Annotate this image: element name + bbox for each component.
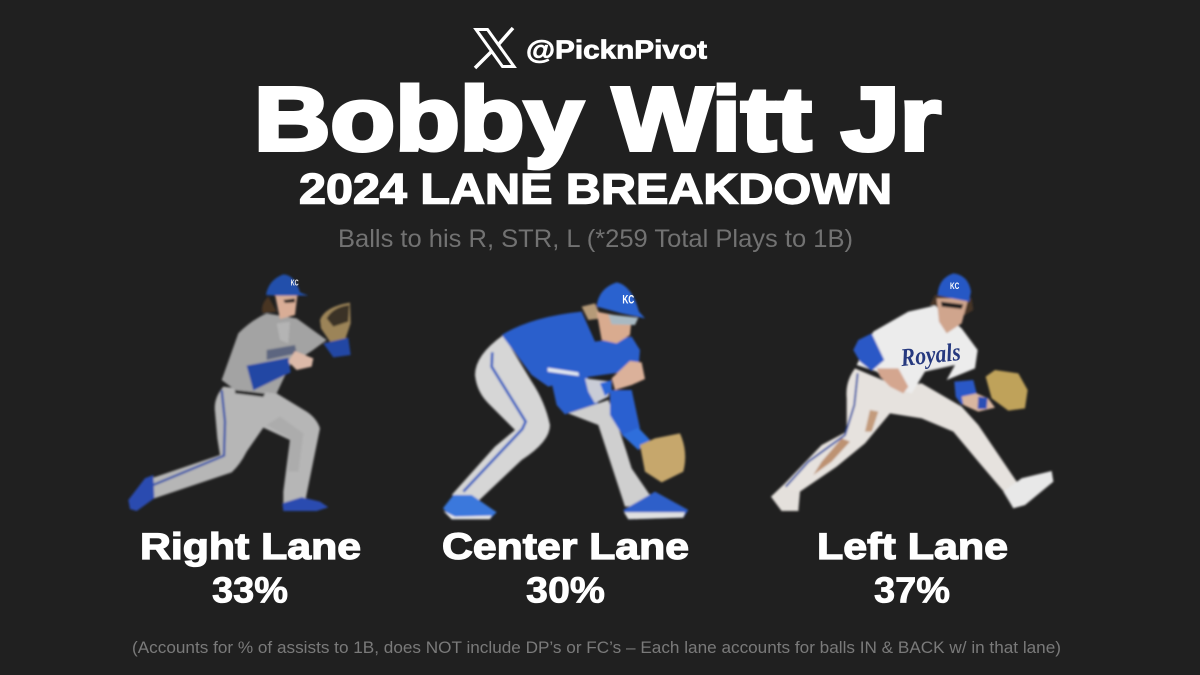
wrist (585, 378, 612, 403)
lane label: center (442, 526, 689, 610)
pant stripe (153, 390, 225, 485)
subtitle: 2024 LANE BREAKDOWN (299, 166, 892, 214)
jersey (857, 306, 978, 393)
face (937, 298, 968, 333)
lane label: right (140, 526, 361, 610)
far arm (610, 390, 640, 437)
player: center lane fielder in blue jersey (443, 282, 688, 519)
handle: @PicknPivot: @PicknPivot (526, 34, 707, 64)
lane label: left: Left Lane (817, 526, 1008, 567)
jersey (502, 312, 640, 387)
glove (320, 303, 351, 342)
title: Bobby Witt Jr (254, 70, 941, 170)
face (597, 312, 632, 343)
near leg (452, 335, 550, 501)
footnote: (Accounts for % of assists to 1B, does NOT include DP’s or FC’s – Each lane accounts for balls IN & BACK w/ in that lane) (132, 638, 1061, 657)
face (275, 294, 297, 319)
cap logo: KC (622, 292, 635, 306)
cap logo: KC (291, 278, 299, 288)
percentage: right: 33% (212, 570, 288, 610)
percentage: left: 37% (874, 570, 950, 610)
cap (938, 273, 971, 302)
sleeve near (853, 333, 884, 371)
percentage: center: 30% (526, 570, 605, 610)
hand (877, 368, 908, 393)
pant stripe (463, 352, 526, 492)
cleats (128, 475, 154, 511)
pants (771, 368, 1053, 511)
pant stripe (786, 373, 858, 487)
belt (235, 390, 265, 397)
far arm (954, 380, 977, 405)
glove (640, 433, 685, 482)
description line: Balls to his R, STR, L (*259 Total Plays to 1B) (338, 225, 853, 253)
cleats (443, 495, 497, 519)
jersey (222, 313, 327, 393)
dirt (813, 438, 850, 475)
glove (986, 370, 1028, 411)
hair (930, 295, 973, 315)
cap (266, 274, 308, 296)
hair (262, 297, 277, 313)
lane label: center: Center Lane (442, 526, 689, 567)
player: left lane fielder in white uniform (771, 273, 1053, 511)
player: right lane fielder in gray uniform (128, 274, 351, 511)
hand (288, 351, 313, 370)
far leg (568, 400, 651, 507)
pants (152, 387, 320, 503)
cleats (771, 488, 798, 511)
hand (612, 361, 645, 390)
icon: X logo (475, 28, 514, 68)
cap logo: KC (950, 281, 959, 291)
arm sleeves (247, 358, 291, 390)
hair (582, 303, 602, 320)
lane label: right: Right Lane (140, 526, 361, 567)
lane label: left (817, 526, 1008, 610)
cap (597, 282, 645, 318)
jersey script: Royals (899, 338, 962, 372)
sleeve near (548, 328, 598, 414)
